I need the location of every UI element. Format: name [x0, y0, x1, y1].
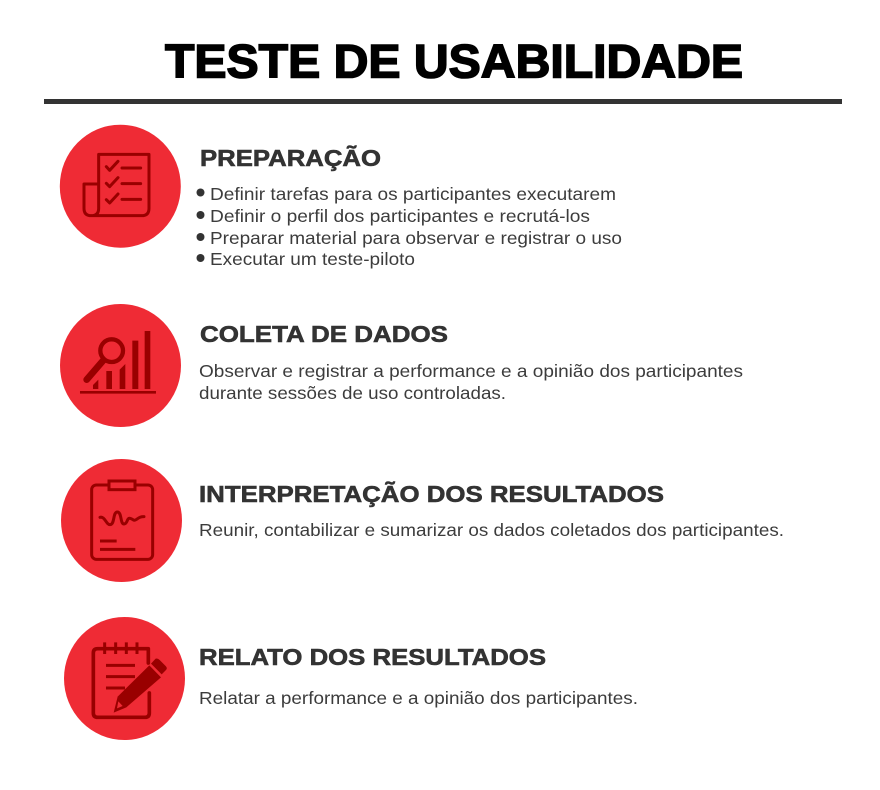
heading: interpretação dos resultados: INTERPRETAÇÃO DOS RESULTADOS: [199, 480, 664, 507]
panel: relato dos resultados: [64, 617, 638, 740]
panel: interpretação dos resultados: [61, 459, 784, 582]
heading: relato dos resultados: RELATO DOS RESULTADOS: [199, 644, 546, 670]
description: Reunir, contabilizar e sumarizar os dados coletados dos participantes.: [199, 520, 784, 540]
icon: magnifier over bar chart: [60, 304, 181, 427]
icon: notepad and pencil: [64, 617, 185, 740]
bullet list: Executar um teste-piloto: [210, 249, 415, 269]
icon: clipboard with waveform: [61, 459, 182, 582]
description: Observar e registrar a performance e a opinião dos participantes: [199, 361, 743, 381]
heading: coleta de dados: COLETA DE DADOS: [200, 321, 448, 347]
bullet list: Preparar material para observar e registrar o uso: [210, 228, 622, 248]
description: Relatar a performance e a opinião dos participantes.: [199, 688, 638, 708]
bullet list: [196, 184, 622, 269]
description: durante sessões de uso controladas.: [199, 383, 506, 403]
icon: checklist document: [60, 125, 181, 248]
panel: coleta de dados: [60, 304, 743, 427]
heading: preparação: PREPARAÇÃO: [200, 144, 381, 171]
bullet list: Definir o perfil dos participantes e recrutá-los: [210, 206, 590, 226]
description: [199, 361, 743, 403]
bullet list: Definir tarefas para os participantes executarem: [210, 184, 616, 204]
panel: preparação: [60, 125, 622, 269]
title: TESTE DE USABILIDADE: [165, 34, 743, 88]
